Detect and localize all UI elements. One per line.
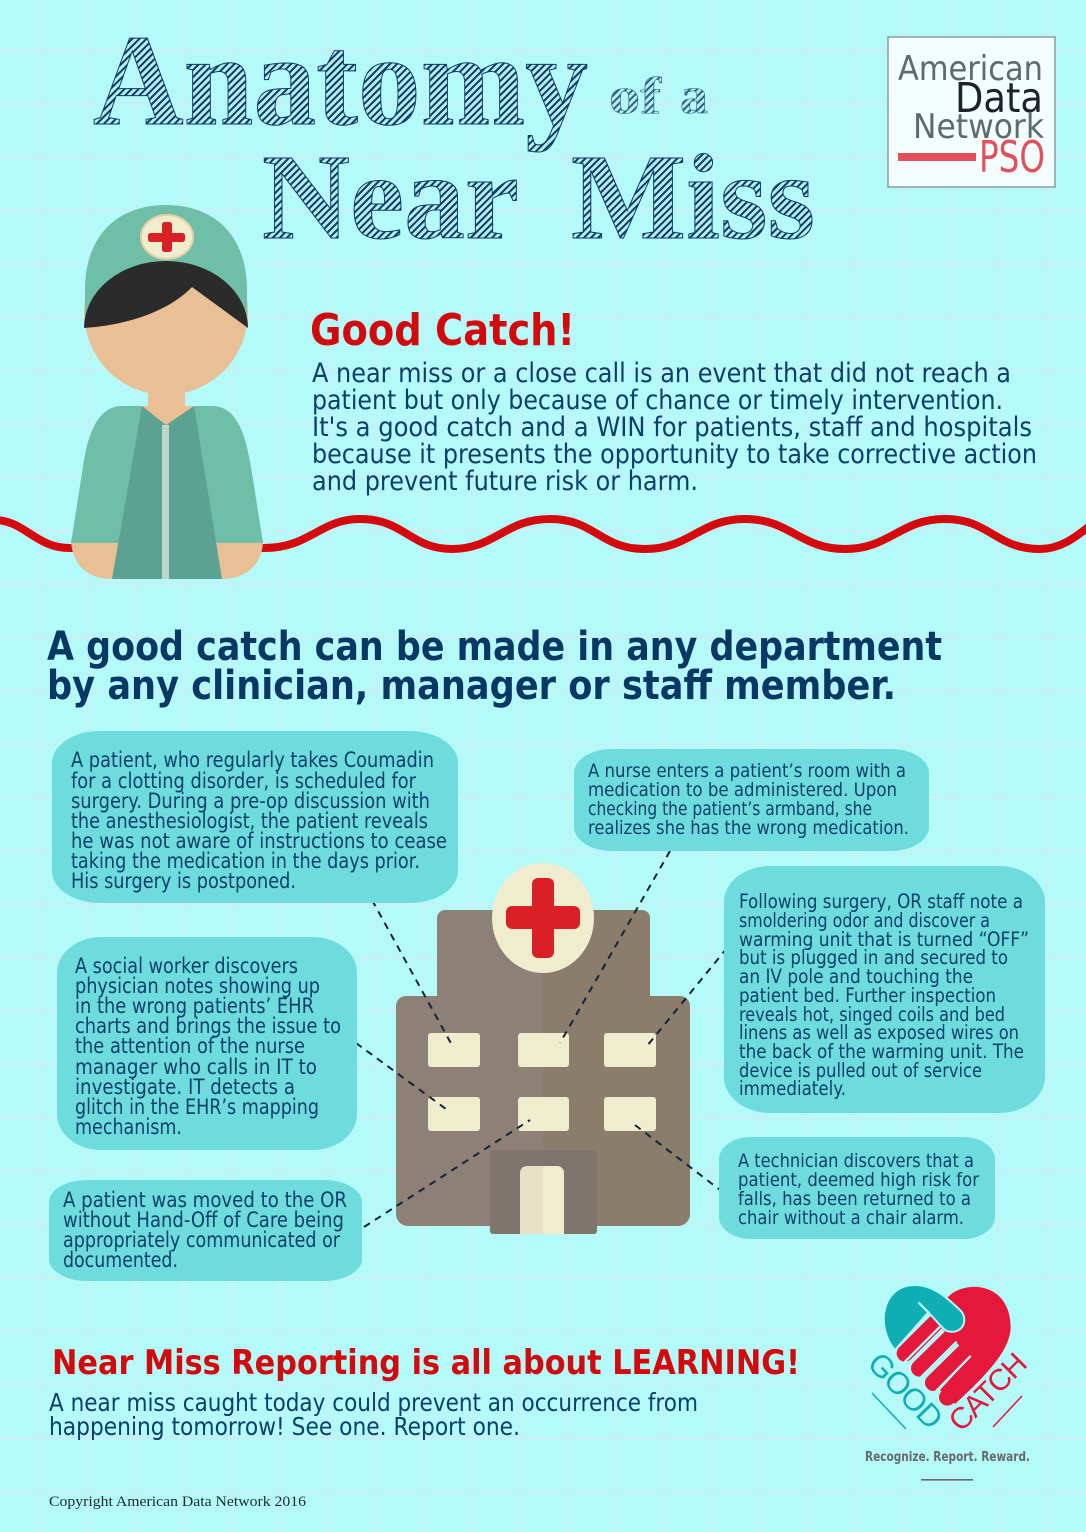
callout: hand-off of care: without Hand-Off of Care being xyxy=(63,1208,344,1232)
callout: warming unit: Following surgery, OR staff note a xyxy=(739,890,1023,913)
callout: nurse wrong medication: medication to be administered. Upon xyxy=(588,779,897,801)
callout: social worker EHR: charts and brings the issue to xyxy=(75,1014,341,1038)
red rule xyxy=(993,1396,1022,1427)
definition text xyxy=(312,358,1037,497)
callout: warming unit xyxy=(724,866,1045,1113)
nurse head xyxy=(84,229,248,395)
callout: hand-off of care xyxy=(49,1180,362,1281)
callout: technician chair alarm xyxy=(719,1137,995,1239)
callout: social worker EHR: glitch in the EHR’s mapping xyxy=(75,1095,319,1119)
callout: social worker EHR: the attention of the nurse xyxy=(75,1034,305,1058)
callout: warming unit: warming unit that is turned “OFF” xyxy=(739,928,1029,951)
definition text: A near miss or a close call is an event that did not reach a xyxy=(312,358,1011,389)
nurse neckline xyxy=(142,406,194,425)
callout: nurse wrong medication: checking the patient’s armband, she xyxy=(588,798,872,820)
closing text: A near miss caught today could prevent an occurrence from xyxy=(49,1388,698,1417)
title: Anatomy xyxy=(93,9,588,153)
title: a xyxy=(680,68,708,125)
title xyxy=(93,9,815,265)
logo: American Data Network PSO: Network xyxy=(913,107,1044,147)
icon: hospital building xyxy=(396,863,690,1234)
callout: social worker EHR: investigate. IT detects a xyxy=(75,1075,295,1099)
cap badge xyxy=(141,215,193,259)
callout: Coumadin patient: for a clotting disorder, is scheduled for xyxy=(71,769,416,793)
callout: technician chair alarm: chair without a chair alarm. xyxy=(738,1207,964,1229)
callout: hand-off of care: appropriately communicated or xyxy=(63,1228,340,1252)
nurse hands xyxy=(71,540,263,579)
cap cross xyxy=(148,222,185,252)
callout: nurse wrong medication xyxy=(574,749,929,851)
closing text xyxy=(49,1388,698,1441)
nurse neck xyxy=(148,390,185,415)
logo: American Data Network PSO xyxy=(888,37,1055,187)
callout: social worker EHR: A social worker discovers xyxy=(75,954,298,978)
callout: technician chair alarm: patient, deemed high risk for xyxy=(738,1169,979,1191)
closing text: happening tomorrow! See one. Report one. xyxy=(49,1412,520,1441)
logo: American Data Network PSO: PSO xyxy=(979,132,1045,183)
copyright: Copyright American Data Network 2016 xyxy=(49,1494,307,1510)
callout: Coumadin patient: His surgery is postponed. xyxy=(71,869,296,893)
callout: Coumadin patient: he was not aware of instructions to cease xyxy=(71,829,447,853)
callout: technician chair alarm: falls, has been returned to a xyxy=(738,1188,971,1210)
callout: warming unit: the back of the warming unit. The xyxy=(739,1040,1024,1063)
callout: Coumadin patient xyxy=(52,731,458,903)
GOOD text: GOOD xyxy=(861,1346,950,1436)
tagline rule xyxy=(921,1479,973,1481)
callout: Coumadin patient: A patient, who regularly takes Coumadin xyxy=(71,748,434,772)
teal rule xyxy=(872,1393,906,1429)
callout: social worker EHR xyxy=(57,937,357,1150)
callout: warming unit: an IV pole and touching the xyxy=(739,965,973,988)
heading: Good Catch: Good Catch! xyxy=(310,305,575,356)
title: of xyxy=(609,68,662,125)
definition text: patient but only because of chance or timely intervention. xyxy=(312,385,1003,416)
callout: social worker EHR: in the wrong patients’ EHR xyxy=(75,994,314,1018)
callout: warming unit: smoldering odor and discover a xyxy=(739,909,990,932)
callout: social worker EHR: mechanism. xyxy=(75,1115,182,1139)
main block left xyxy=(396,996,543,1226)
callout: social worker EHR: manager who calls in IT to xyxy=(75,1055,317,1079)
nurse cap xyxy=(85,205,247,328)
callout: warming unit: linens as well as exposed wires on xyxy=(739,1021,1019,1044)
nurse hair xyxy=(84,261,248,328)
callout: hand-off of care: documented. xyxy=(63,1248,178,1272)
section heading: A good catch can be made in any department xyxy=(47,624,942,670)
title: Miss xyxy=(571,130,815,265)
title: Near xyxy=(262,130,519,265)
nurse arms xyxy=(71,406,263,543)
main block right xyxy=(543,996,690,1226)
heading: reporting: Near Miss Reporting is all about LEARNING! xyxy=(52,1343,800,1383)
nurse scrub top xyxy=(112,406,222,579)
callout: nurse wrong medication: A nurse enters a patient’s room with a xyxy=(588,760,906,782)
windows xyxy=(428,1033,656,1131)
callout: social worker EHR: physician notes showing up xyxy=(75,974,320,998)
dashed connector lines xyxy=(356,851,727,1227)
callout: technician chair alarm: A technician discovers that a xyxy=(738,1150,974,1172)
nurse zipper xyxy=(162,425,169,579)
callout: warming unit: device is pulled out of service xyxy=(739,1059,982,1082)
callout: warming unit: but is plugged in and secured to xyxy=(739,946,1008,969)
logo: Good Catch heart xyxy=(861,1285,1034,1438)
definition text: and prevent future risk or harm. xyxy=(312,466,698,497)
callout: warming unit: reveals hot, singed coils and bed xyxy=(739,1003,1005,1026)
heart and hands xyxy=(884,1285,1011,1404)
door xyxy=(520,1166,543,1234)
icon: nurse xyxy=(71,205,263,579)
red wave divider xyxy=(0,519,1086,549)
callout: Coumadin patient: surgery. During a pre-op discussion with xyxy=(71,789,430,813)
door frame xyxy=(490,1150,597,1234)
tower xyxy=(437,910,543,1100)
red cross xyxy=(506,878,580,958)
tagline: Recognize. Report. Reward. xyxy=(865,1450,1030,1465)
section heading: by any clinician, manager or staff member. xyxy=(47,663,896,709)
logo: American Data Network PSO: American xyxy=(898,49,1043,89)
medallion xyxy=(492,863,594,973)
logo: American Data Network PSO: Data xyxy=(955,74,1043,122)
callout: hand-off of care: A patient was moved to the OR xyxy=(63,1188,347,1212)
callout: warming unit: patient bed. Further inspection xyxy=(739,984,996,1007)
callout: warming unit: immediately. xyxy=(739,1077,846,1100)
CATCH text: CATCH xyxy=(943,1347,1034,1438)
callout: Coumadin patient: taking the medication in the days prior. xyxy=(71,849,420,873)
section heading xyxy=(47,624,942,709)
callout: nurse wrong medication: realizes she has the wrong medication. xyxy=(588,817,909,839)
callout: Coumadin patient: the anesthesiologist, the patient reveals xyxy=(71,809,428,833)
